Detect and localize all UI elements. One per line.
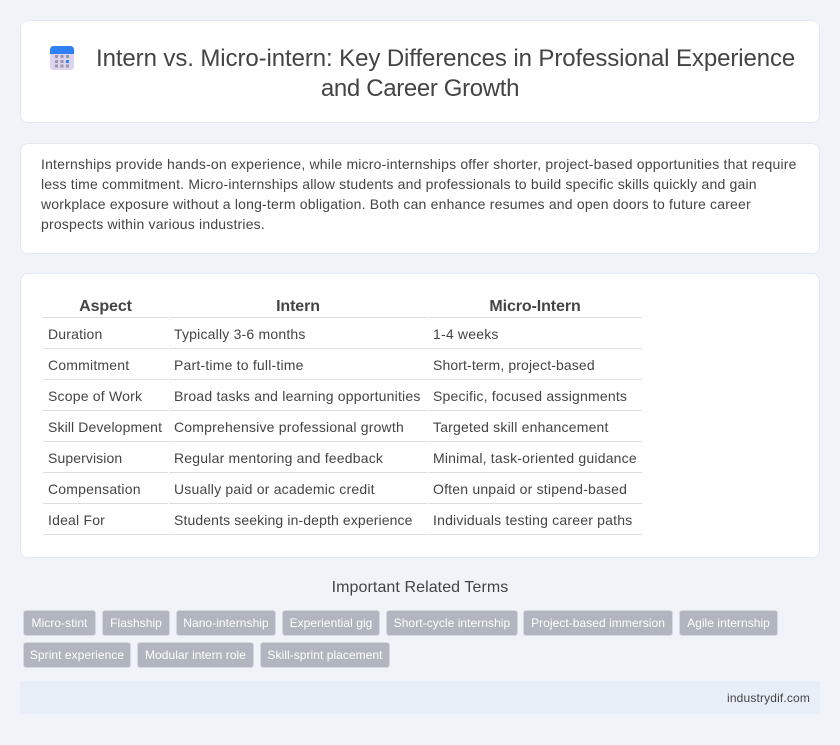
tag: Skill-sprint placement xyxy=(260,642,390,668)
table header: Intern: Intern xyxy=(276,298,320,315)
tag: Project-based immersion: Project-based immersion xyxy=(531,616,665,630)
row: Scope of Work: Scope of Work xyxy=(48,388,142,404)
title: Intern vs. Micro-intern: Key Differences in Professional Experience xyxy=(96,45,795,72)
panel: title card xyxy=(20,20,820,123)
tag: Micro-stint xyxy=(23,610,96,636)
row: Supervision: Supervision xyxy=(48,450,122,466)
panel: comparison table xyxy=(20,273,820,558)
row: Supervision xyxy=(48,450,637,466)
tag: Short-cycle internship xyxy=(386,610,518,636)
tag: Flashship xyxy=(102,610,170,636)
table header: Micro-Intern: Micro-Intern xyxy=(489,298,581,315)
tag: Modular intern role xyxy=(137,642,254,668)
tag: Flashship: Flashship xyxy=(110,616,162,630)
tag: Skill-sprint placement: Skill-sprint placement xyxy=(267,648,383,662)
footer bar xyxy=(20,681,820,714)
row: Commitment: Part-time to full-time xyxy=(174,357,304,373)
tag: Nano-internship xyxy=(176,610,276,636)
row: Skill Development: Skill Development xyxy=(48,419,162,435)
intro text: prospects within various industries. xyxy=(41,216,265,232)
row: Scope of Work: Specific, focused assignments xyxy=(433,388,627,404)
tag: Experiential gig: Experiential gig xyxy=(290,616,372,630)
tag: Short-cycle internship: Short-cycle internship xyxy=(394,616,510,630)
intro text xyxy=(41,156,797,232)
tag: Agile internship: Agile internship xyxy=(687,616,770,630)
intro text: less time commitment. Micro-internships allow students and professionals to build specific skills quickly and gain xyxy=(41,176,757,192)
intro text: Internships provide hands-on experience, while micro-internships offer shorter, project-based opportunities that require xyxy=(41,156,797,172)
title: and Career Growth xyxy=(321,75,519,102)
tag: Nano-internship: Nano-internship xyxy=(183,616,269,630)
row: Duration: Typically 3-6 months xyxy=(174,326,306,342)
row: Skill Development xyxy=(48,419,609,435)
row: Supervision: Minimal, task-oriented guidance xyxy=(433,450,637,466)
row: Compensation: Compensation xyxy=(48,481,141,497)
panel: intro xyxy=(20,143,820,254)
row: Skill Development: Targeted skill enhancement xyxy=(433,419,609,435)
tag: Agile internship xyxy=(679,610,778,636)
tag: Micro-stint: Micro-stint xyxy=(32,616,87,630)
row: Commitment: Short-term, project-based xyxy=(433,357,595,373)
row: Ideal For xyxy=(48,512,632,528)
row: Duration: Duration xyxy=(48,326,103,342)
row: Ideal For: Individuals testing career paths xyxy=(433,512,632,528)
row: Ideal For: Ideal For xyxy=(48,512,105,528)
title xyxy=(96,45,795,102)
intro text: workplace exposure without a long-term obligation. Both can enhance resumes and open doors to future career xyxy=(41,196,751,212)
tag: Project-based immersion xyxy=(523,610,673,636)
table header: Aspect: Aspect xyxy=(79,298,132,315)
heading: related terms: Important Related Terms xyxy=(332,579,508,596)
footer source: industrydif.com xyxy=(727,691,810,705)
row: Skill Development: Comprehensive professional growth xyxy=(174,419,404,435)
row: Compensation: Often unpaid or stipend-based xyxy=(433,481,627,497)
row: Supervision: Regular mentoring and feedback xyxy=(174,450,383,466)
row: Compensation xyxy=(48,481,627,497)
row: Compensation: Usually paid or academic credit xyxy=(174,481,375,497)
row: Duration xyxy=(48,326,499,342)
row: Duration: 1-4 weeks xyxy=(433,326,499,342)
row: Commitment xyxy=(48,357,595,373)
icon: calendar xyxy=(50,46,74,70)
row: Scope of Work xyxy=(48,388,627,404)
row: Commitment: Commitment xyxy=(48,357,129,373)
row: Ideal For: Students seeking in-depth experience xyxy=(174,512,413,528)
tags xyxy=(23,610,778,668)
tag: Sprint experience: Sprint experience xyxy=(30,648,124,662)
tag: Experiential gig xyxy=(282,610,380,636)
tag: Modular intern role: Modular intern role xyxy=(145,648,246,662)
row: Scope of Work: Broad tasks and learning opportunities xyxy=(174,388,421,404)
tag: Sprint experience xyxy=(23,642,131,668)
